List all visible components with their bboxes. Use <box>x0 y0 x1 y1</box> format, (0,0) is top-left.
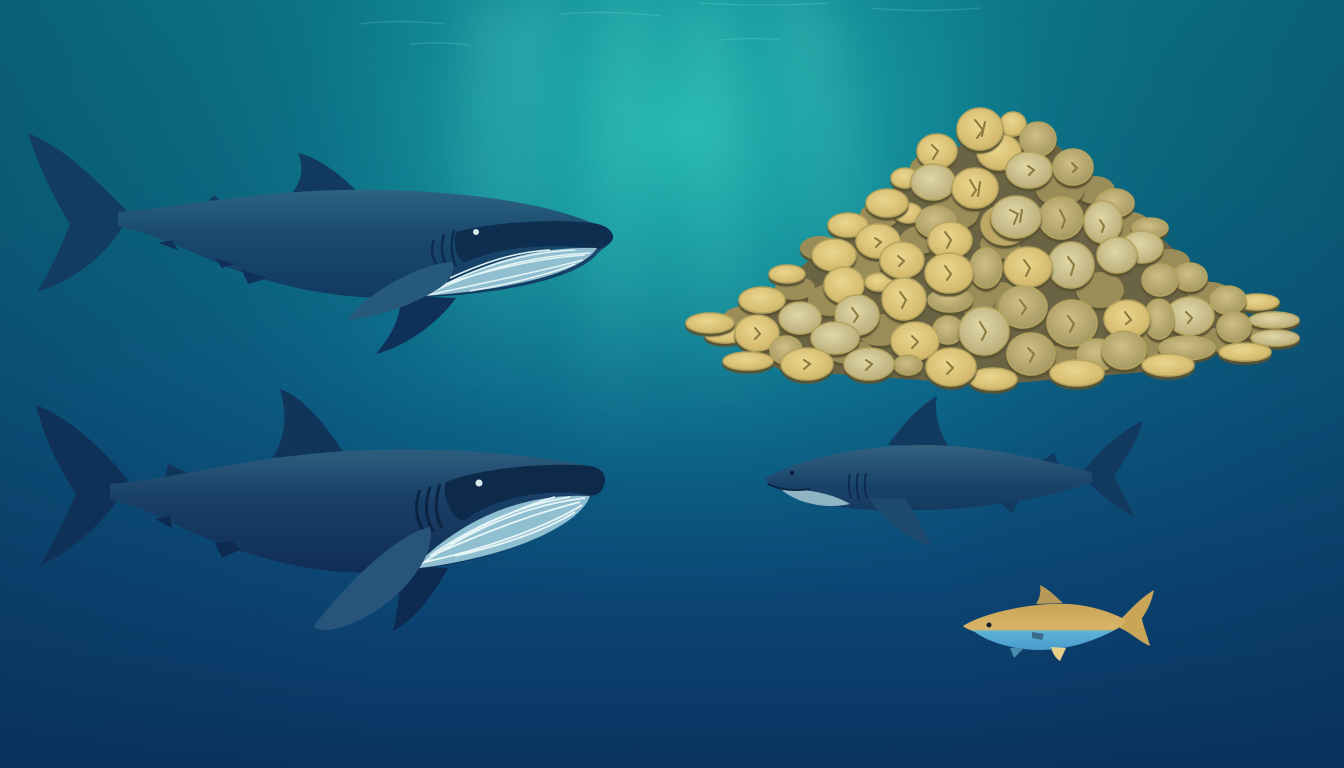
whale tail <box>36 405 128 566</box>
eye <box>790 471 794 475</box>
coins: middle layer <box>739 134 1251 344</box>
shark tail <box>1084 421 1143 518</box>
tail <box>1120 590 1154 646</box>
dorsal fin <box>888 396 949 447</box>
small back fin <box>207 195 223 203</box>
throat grooves <box>425 248 597 296</box>
pectoral fin <box>870 498 932 546</box>
gill lines <box>849 473 867 499</box>
coins: filler layer <box>723 154 1270 374</box>
pile base shadow <box>720 130 1270 385</box>
whale: lower left <box>36 389 605 631</box>
coins: front layer <box>723 108 1271 390</box>
small fins <box>1000 453 1060 513</box>
lower pectoral fin <box>376 296 456 354</box>
whale: upper left <box>28 133 613 354</box>
gill folds <box>432 230 456 268</box>
pectoral fin <box>347 262 453 320</box>
body <box>963 604 1126 650</box>
dorsal fin <box>292 153 356 193</box>
lower fins <box>1051 647 1066 661</box>
eye <box>473 229 479 235</box>
eye <box>986 622 992 628</box>
gill folds <box>417 484 442 532</box>
dorsal fin <box>1036 585 1063 604</box>
dorsal fin <box>272 389 343 458</box>
eye <box>476 480 482 486</box>
belly fins <box>155 516 240 558</box>
pectoral fin <box>1032 632 1044 640</box>
lower pectoral fin <box>393 566 448 631</box>
whale head <box>455 221 613 262</box>
water surface highlights <box>360 3 980 45</box>
mouth and teeth <box>768 484 810 490</box>
whale head <box>445 465 605 521</box>
belly fins <box>158 240 268 284</box>
small golden shark <box>963 585 1154 661</box>
pectoral fin <box>314 527 431 630</box>
throat grooves <box>412 496 590 569</box>
shark body <box>765 445 1092 510</box>
coin emboss marks <box>755 120 1192 374</box>
light rays <box>430 0 900 480</box>
shark: right, swimming left <box>765 396 1143 546</box>
whale body <box>110 449 604 573</box>
whale tail <box>28 133 128 292</box>
small back fin <box>165 464 190 478</box>
shark belly <box>782 490 850 506</box>
coin pile <box>686 108 1299 390</box>
whale body <box>118 190 613 298</box>
coins: back layer <box>686 112 1299 346</box>
